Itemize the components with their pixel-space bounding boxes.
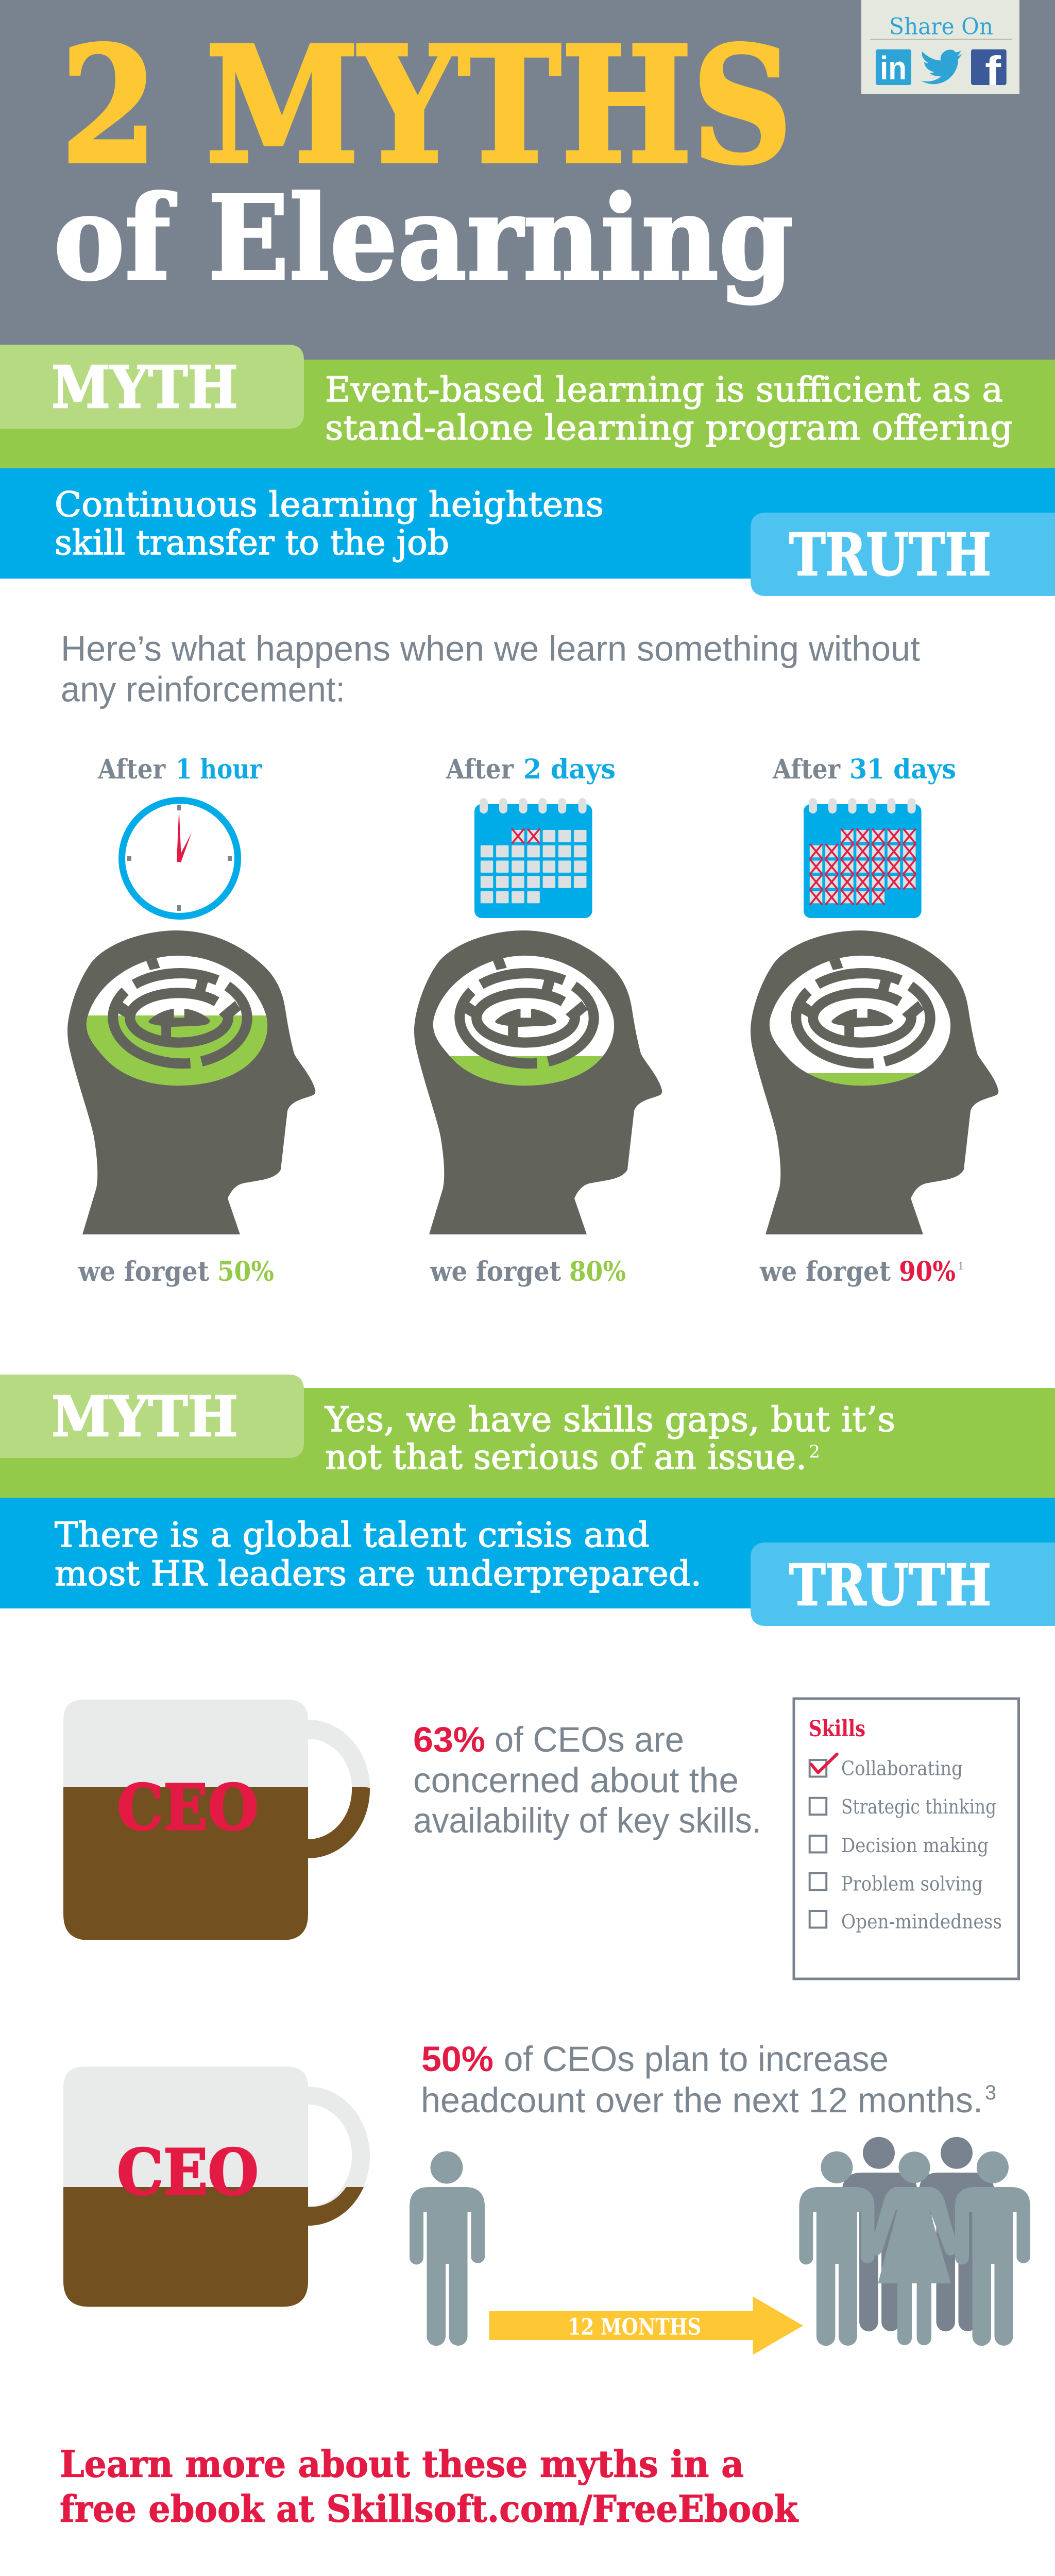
column: after 31 days [751, 754, 998, 1287]
checklist heading: Skills [809, 1716, 865, 1742]
truth statement: Continuous learning heightens [55, 485, 604, 524]
heading [97, 754, 262, 785]
heading: After [97, 754, 166, 785]
icon: single person [410, 2151, 485, 2346]
panel: skills checklist [794, 1699, 1019, 1979]
head with maze, 50% retained [67, 930, 315, 1234]
arrow: 12 months: 12 MONTHS [568, 2314, 701, 2340]
icon: calendar 2 days [474, 798, 592, 918]
truth label: TRUTH [789, 1552, 991, 1618]
myth statement [325, 370, 1013, 448]
mug label: CEO [117, 1770, 259, 1844]
caption: 1 [958, 1260, 964, 1272]
checkboxes [810, 1760, 826, 1928]
caption: we forget [759, 1256, 891, 1287]
icon: calendar 31 days [804, 798, 922, 918]
icon: CEO mug 50% [63, 2067, 370, 2307]
checklist items: Decision making [841, 1834, 989, 1857]
myth statement [325, 1400, 895, 1477]
heading: After [772, 754, 841, 785]
icon: clock [122, 801, 238, 916]
truth statement [55, 1515, 702, 1594]
intro text: Here’s what happens when we learn something without [61, 629, 920, 669]
myth tab [0, 345, 304, 429]
truth statement: most HR leaders are underprepared. [55, 1554, 702, 1594]
checklist items: Strategic thinking [841, 1795, 996, 1818]
stat: 63% of CEOs [413, 1720, 761, 1840]
caption: we forget [78, 1256, 209, 1287]
heading [446, 754, 616, 785]
stat: 50% of CEOs [421, 2039, 996, 2120]
icon: red check [811, 1754, 837, 1773]
heading: 1 hour [176, 754, 262, 785]
arrow: 12 months [489, 2297, 803, 2355]
header panel [0, 0, 1055, 361]
checklist items: Collaborating [841, 1757, 963, 1780]
truth statement: There is a global talent crisis and [55, 1515, 650, 1555]
head with maze, 10% retained [751, 930, 998, 1234]
truth tab [751, 1543, 1055, 1626]
intro text [61, 629, 920, 709]
back row [842, 2137, 994, 2331]
stat: 63% of CEOs: concerned about the [413, 1760, 739, 1800]
myth statement: stand-alone learning program offering [325, 408, 1013, 448]
heading: 31 days [849, 754, 956, 785]
heading: After [446, 754, 514, 785]
icon: linkedin: in [880, 49, 907, 87]
truth statement [55, 485, 604, 563]
myth label: MYTH [52, 1384, 238, 1449]
panel: truth 1 [0, 468, 1055, 596]
truth tab [751, 513, 1055, 596]
myth statement: 2 [809, 1442, 820, 1462]
stat: 63% of CEOs: of CEOs are [495, 1720, 684, 1759]
stat: 50% of CEOs: headcount over the next 12 months. [421, 2080, 983, 2120]
stat: 63% of CEOs: availability of key skills. [413, 1801, 761, 1840]
myth statement: Yes, we have skills gaps, but it’s [325, 1400, 895, 1439]
title: 2 MYTHS: 2 MYTHS [61, 12, 792, 200]
mug label: CEO [117, 2135, 259, 2209]
caption: 90% [899, 1256, 956, 1287]
icon: facebook: f [985, 48, 1001, 94]
myth statement: Event-based learning is sufficient as a [325, 370, 1003, 410]
call to action: Learn more about these myths in a [60, 2443, 744, 2486]
call to action [60, 2443, 799, 2531]
icon: facebook [971, 48, 1007, 94]
share panel [861, 0, 1019, 94]
caption: 80% [569, 1256, 626, 1287]
panel: myth 1 [0, 345, 1055, 468]
truth statement: skill transfer to the job [55, 523, 449, 563]
column: after 1 hour [67, 754, 315, 1287]
stat: 63% of CEOs: 63% [413, 1720, 485, 1759]
intro text: any reinforcement: [61, 670, 345, 709]
icon: group of people [799, 2137, 1030, 2346]
share label: Share On [889, 14, 993, 40]
checklist items: Open-mindedness [841, 1910, 1002, 1933]
stat: 50% of CEOs: 3 [985, 2081, 996, 2104]
caption: we forget [430, 1256, 561, 1287]
head with maze, 20% retained [414, 930, 662, 1234]
panel: myth 2 [0, 1375, 1055, 1498]
icon: CEO mug 63% [63, 1700, 370, 1940]
stat: 50% of CEOs: of CEOs plan to increase [504, 2039, 889, 2079]
truth label: TRUTH [789, 521, 991, 589]
stat: 50% of CEOs: 50% [421, 2039, 494, 2079]
caption [759, 1256, 964, 1287]
panel: truth 2 [0, 1498, 1055, 1626]
call to action: free ebook at Skillsoft.com/FreeEbook [60, 2487, 799, 2531]
checklist items: Problem solving [841, 1872, 983, 1895]
front row [799, 2151, 1030, 2346]
myth statement: not that serious of an issue. [325, 1437, 807, 1477]
heading: 2 days [523, 754, 616, 785]
icon: twitter bird [921, 49, 962, 84]
myth tab [0, 1375, 304, 1458]
heading [772, 754, 956, 785]
checklist items [841, 1757, 1002, 1933]
caption: 50% [217, 1256, 274, 1287]
column: after 2 days [414, 754, 662, 1287]
title: of Elearning: of Elearning [54, 171, 793, 307]
myth label: MYTH [52, 354, 238, 421]
